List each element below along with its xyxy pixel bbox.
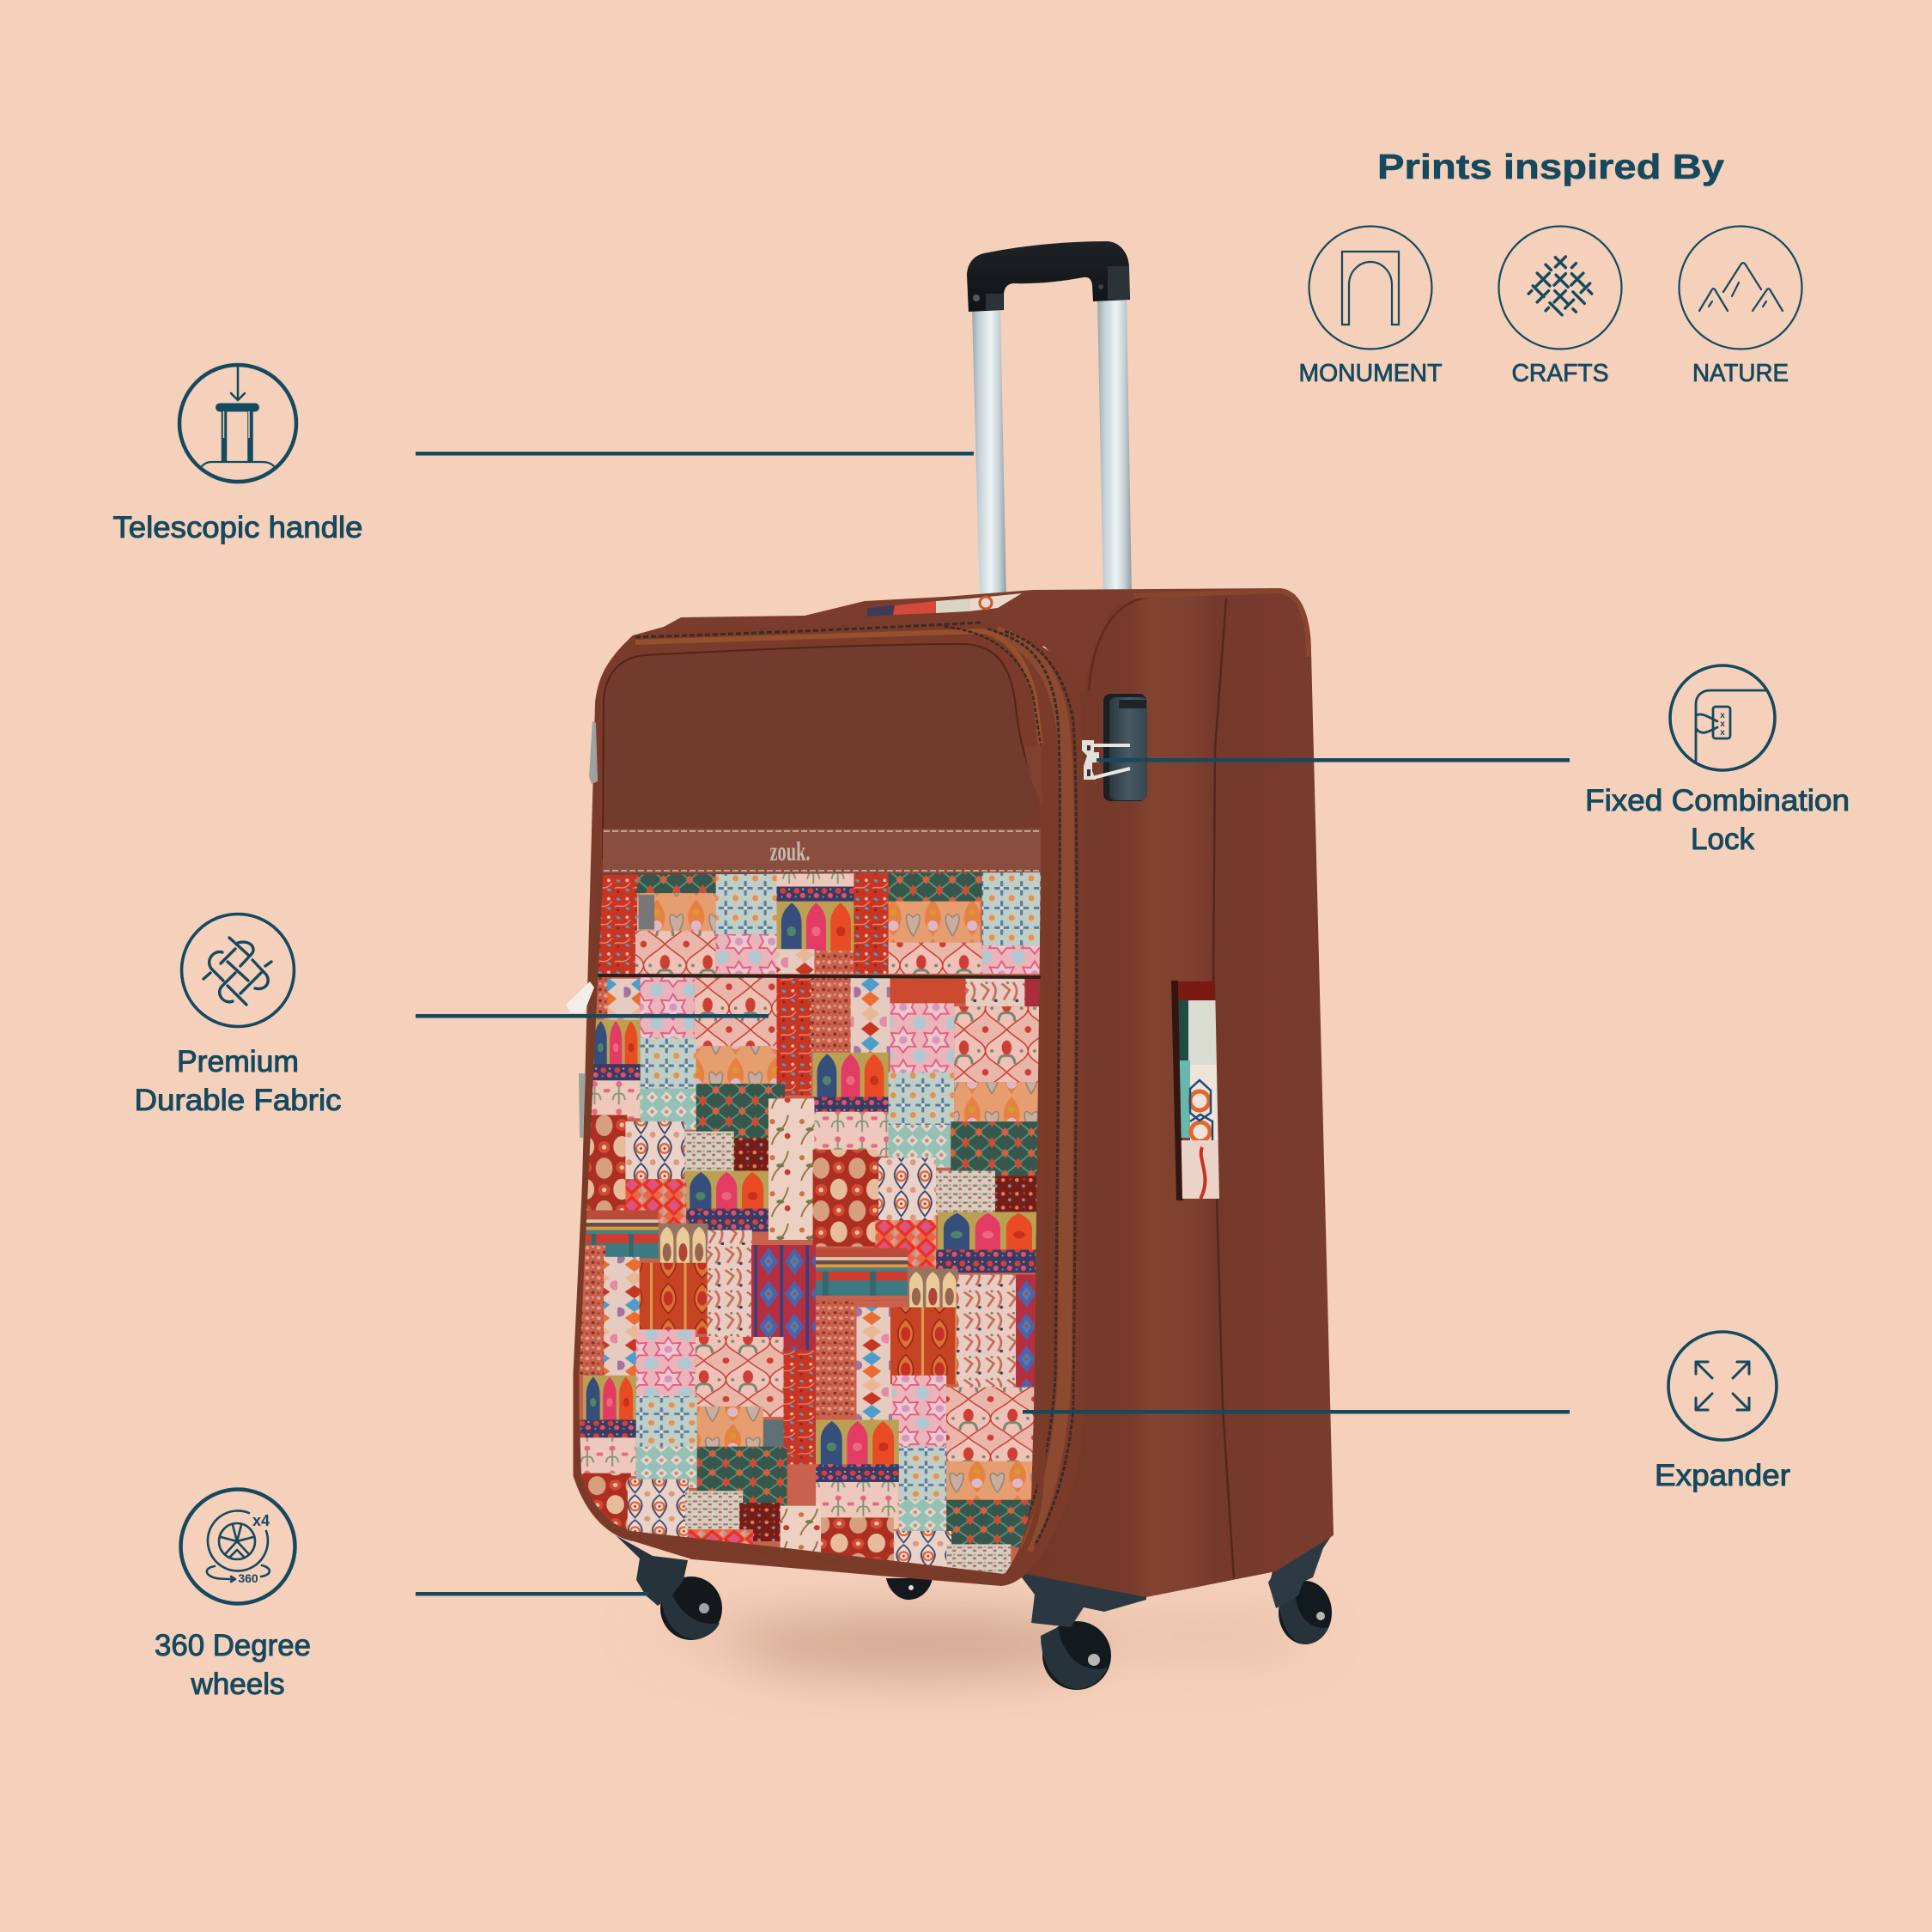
print panel bbox=[567, 867, 1048, 1597]
side seams bbox=[1089, 597, 1234, 1578]
top surface bbox=[595, 588, 1279, 704]
front zipper across print bbox=[598, 975, 1041, 977]
leader line: wheels bbox=[416, 1592, 648, 1595]
leader line: expander bbox=[1023, 1410, 1570, 1413]
label: CRAFTS bbox=[1511, 360, 1609, 387]
combination lock bbox=[1082, 694, 1147, 801]
label: Fixed Combination bbox=[1585, 784, 1850, 817]
floor shadow under suitcase bbox=[644, 1615, 1314, 1674]
label: Premium bbox=[177, 1045, 299, 1078]
icon: wheel: x4 bbox=[252, 1512, 270, 1529]
icon: lock: x bbox=[1720, 728, 1725, 738]
side carry-handle slot with print bbox=[1171, 981, 1221, 1200]
wheel: rear-right caster bbox=[1268, 1533, 1334, 1644]
feature: telescopic handle bbox=[113, 365, 362, 544]
label: MONUMENT bbox=[1298, 360, 1443, 387]
label: wheels bbox=[190, 1668, 285, 1701]
icon: lock: x bbox=[1720, 720, 1725, 729]
label: 360 Degree bbox=[155, 1629, 311, 1662]
feature: expander bbox=[1655, 1332, 1790, 1492]
label bbox=[134, 1045, 342, 1117]
leather band with logo bbox=[603, 829, 1041, 873]
top print strip bbox=[867, 593, 1022, 617]
label: Lock bbox=[1691, 823, 1754, 856]
front body gusset bbox=[575, 623, 1084, 1586]
wheels bbox=[616, 1533, 1334, 1690]
heading: prints inspired by: Prints inspired By bbox=[1377, 147, 1724, 186]
icon: wheel bbox=[180, 1489, 295, 1604]
leader line: fabric bbox=[416, 1014, 769, 1018]
wheel: back caster bbox=[886, 1578, 933, 1600]
front piping edge bbox=[576, 872, 1048, 1582]
wheel: front-right caster bbox=[1016, 1570, 1146, 1690]
leader line: telescopic handle bbox=[416, 452, 974, 455]
print inspiration: crafts bbox=[1499, 227, 1621, 387]
label: NATURE bbox=[1692, 360, 1789, 387]
label: Durable Fabric bbox=[134, 1084, 342, 1117]
icon: wheel: 360 bbox=[238, 1571, 258, 1585]
feature: fixed combination lock bbox=[1585, 665, 1850, 856]
logo: zouk. bbox=[769, 835, 811, 866]
zipper pulls left bbox=[566, 721, 598, 1138]
telescopic handle bbox=[967, 241, 1132, 601]
icon: expander arrows bbox=[1668, 1332, 1777, 1440]
print inspiration: nature bbox=[1680, 227, 1801, 387]
icon: monument arch bbox=[1309, 227, 1432, 349]
label bbox=[1585, 784, 1850, 856]
wheel: front-left caster bbox=[616, 1535, 722, 1640]
upper pocket bbox=[603, 644, 1042, 874]
label: Expander bbox=[1655, 1459, 1790, 1492]
feature: 360 degree wheels bbox=[155, 1489, 311, 1701]
label bbox=[155, 1629, 311, 1701]
feature: premium durable fabric bbox=[134, 914, 342, 1117]
icon: lock bbox=[1670, 665, 1775, 770]
suitcase bbox=[566, 241, 1334, 1690]
side top piping bbox=[1133, 591, 1309, 657]
icon: mountains bbox=[1680, 227, 1801, 349]
side panel bbox=[1021, 588, 1334, 1597]
print inspiration: monument bbox=[1298, 227, 1443, 387]
icon: woven fabric bbox=[182, 914, 294, 1027]
icon: telescopic handle bbox=[179, 365, 296, 482]
leader line: lock bbox=[1097, 758, 1570, 762]
icon: crafts weave bbox=[1499, 227, 1621, 349]
zipper tracks bbox=[635, 623, 1077, 1550]
icon: lock: x bbox=[1720, 711, 1725, 720]
label: Telescopic handle bbox=[113, 511, 362, 544]
